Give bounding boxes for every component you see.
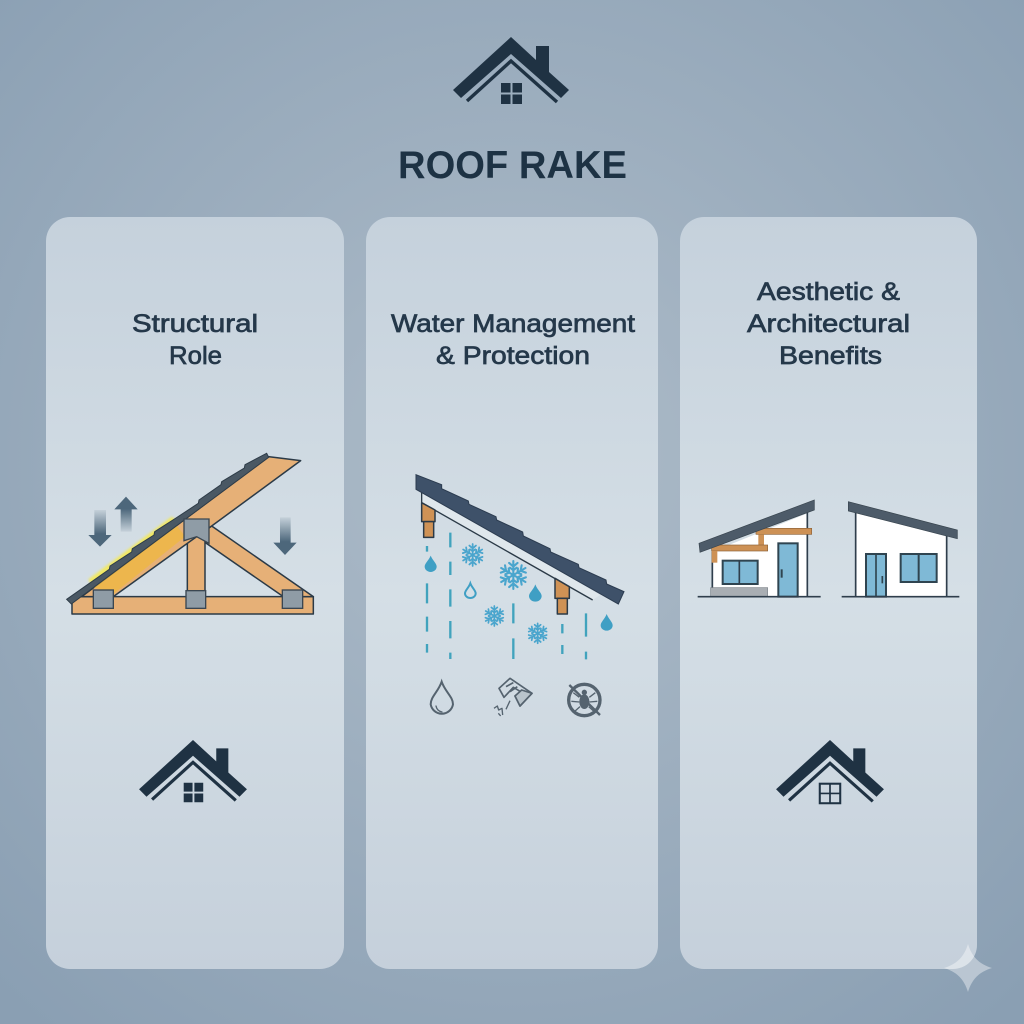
snowflakes (461, 544, 548, 643)
panel background: structural (46, 217, 344, 969)
icon: house panel 1 (139, 740, 247, 802)
panel: structural role (46, 217, 344, 969)
load arrow: down right (273, 517, 297, 555)
heading: water management: & Protection (436, 342, 590, 370)
heading: structural role: Role (169, 342, 222, 370)
icon: sparkle (944, 944, 992, 992)
load arrow: down left (88, 510, 112, 547)
panel: water management (366, 217, 658, 969)
icon: water drop outline (431, 682, 453, 714)
house illustrations (698, 500, 959, 597)
panel: aesthetic benefits (680, 217, 977, 969)
heading: structural role (132, 310, 258, 370)
panel background: water (366, 217, 658, 969)
centre post (187, 535, 205, 593)
icon: house panel 3 (776, 740, 884, 803)
water drops (425, 556, 613, 631)
truss diagram (67, 453, 313, 614)
heading: aesthetic benefits: Architectural (747, 310, 910, 338)
shingles (67, 453, 269, 604)
heading: aesthetic benefits (747, 278, 910, 370)
heading: aesthetic benefits: Benefits (779, 342, 882, 370)
soffit line (422, 490, 600, 600)
heading: aesthetic benefits: Aesthetic & (757, 278, 900, 306)
icon: top house logo (453, 37, 569, 104)
main rafter (82, 457, 301, 597)
gusset plates (93, 519, 303, 608)
heading: structural role: Structural (132, 310, 258, 338)
bottom chord (72, 597, 313, 614)
roof and weather diagram (416, 475, 624, 716)
rain (427, 533, 586, 659)
heading: water management: Water Management (391, 310, 635, 338)
title: ROOF RAKE (398, 144, 627, 187)
right diagonal (197, 526, 313, 597)
rafter tails (422, 503, 569, 614)
icon: cracked shingle (494, 678, 532, 716)
house with exposed beams (698, 500, 821, 597)
load arrow: up (114, 497, 138, 532)
yellow highlight (88, 517, 185, 594)
roof shingles (416, 475, 624, 604)
heading: water management (391, 310, 635, 370)
panel background: aesthetic (680, 217, 977, 969)
icon: no pests (569, 684, 600, 716)
house with plain rake (842, 502, 959, 597)
